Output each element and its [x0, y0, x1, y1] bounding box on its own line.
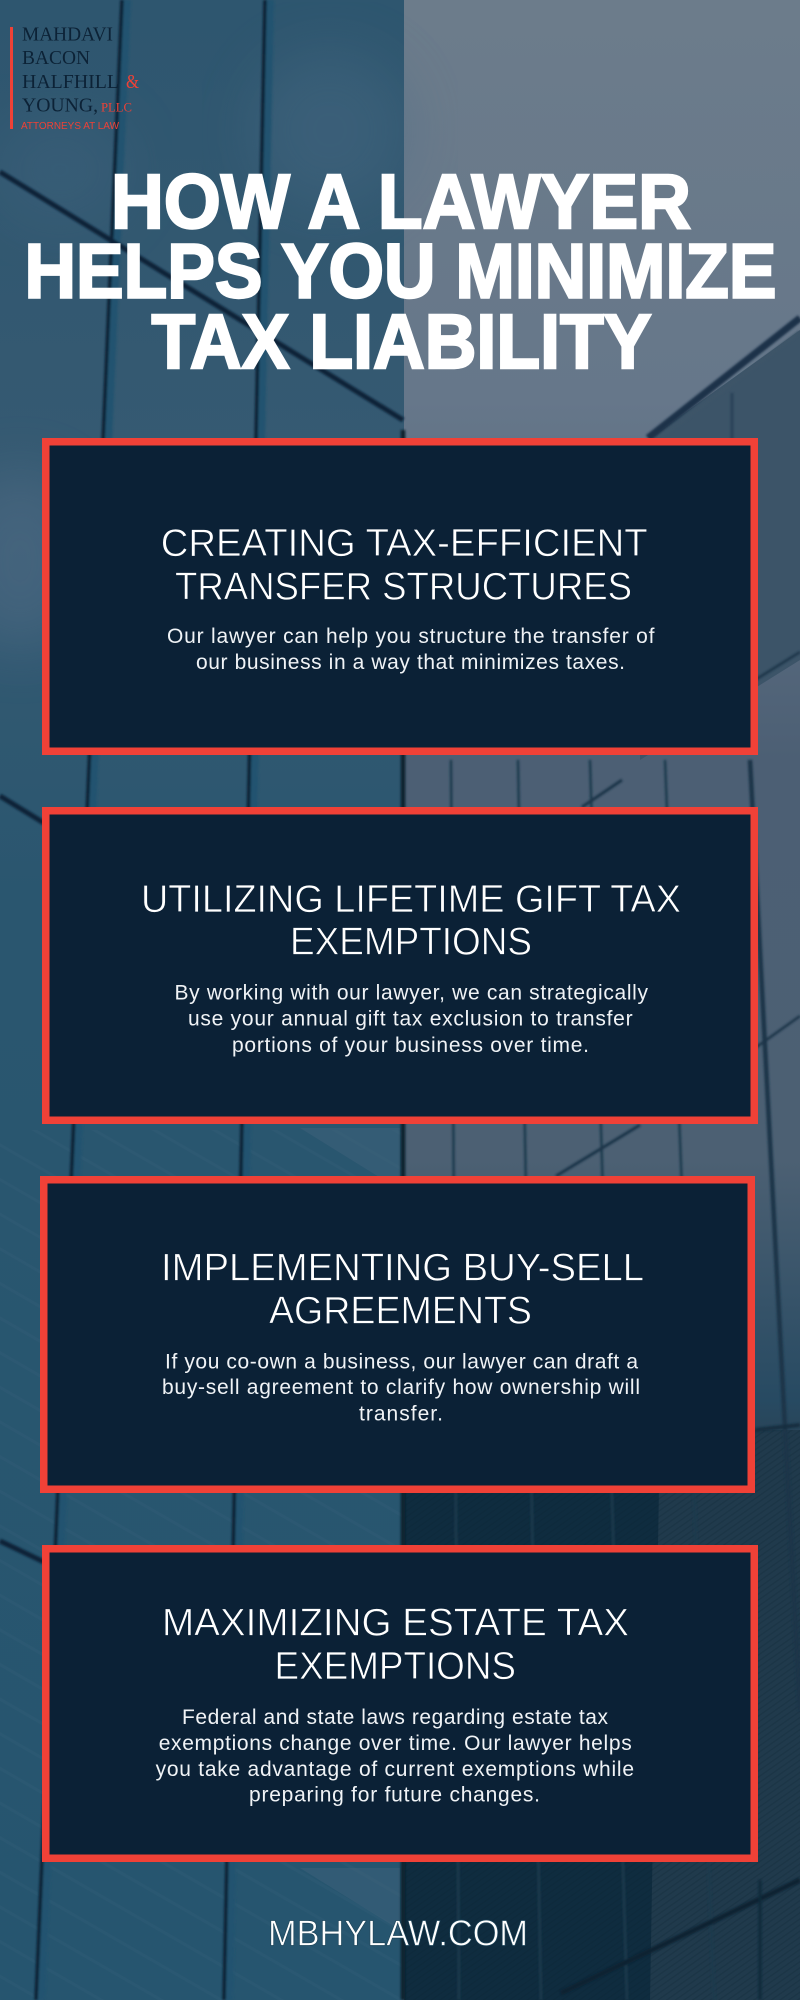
body text [162, 1351, 640, 1426]
logo firm name: BACON [22, 47, 90, 69]
logo firm name [22, 24, 139, 117]
body text: portions of your business over time. [232, 1034, 589, 1057]
heading [141, 878, 681, 964]
logo firm name: HALFHILL [22, 71, 119, 93]
title: TAX LIABILITY [152, 299, 652, 385]
logo firm name: MAHDAVI [22, 24, 113, 46]
footer website: MBHYLAW.COM [268, 1913, 528, 1954]
panel: creating tax-efficient transfer structures [46, 442, 754, 751]
panel: utilizing lifetime gift tax exemptions [46, 811, 754, 1120]
body text: preparing for future changes. [249, 1784, 540, 1807]
logo firm name: & [126, 71, 139, 93]
body text: you take advantage of current exemptions while [156, 1758, 634, 1781]
body text [167, 625, 655, 674]
heading: UTILIZING LIFETIME GIFT TAX [141, 878, 681, 921]
title: HOW A LAWYER [111, 159, 691, 245]
title [24, 159, 776, 385]
body text: use your annual gift tax exclusion to transfer [188, 1008, 633, 1031]
body text: Federal and state laws regarding estate tax [182, 1706, 608, 1729]
heading: MAXIMIZING ESTATE TAX [162, 1602, 629, 1645]
heading: EXEMPTIONS [290, 920, 532, 964]
body text: buy-sell agreement to clarify how ownership will [162, 1376, 640, 1399]
heading: IMPLEMENTING BUY-SELL [161, 1246, 644, 1290]
panel: implementing buy-sell agreements [44, 1180, 751, 1489]
panel: maximizing estate tax exemptions [46, 1549, 754, 1858]
logo: Mahdavi Bacon Halfhill & Young PLLC [10, 24, 139, 132]
heading [162, 1602, 629, 1688]
heading [161, 1246, 644, 1333]
body text [174, 982, 648, 1057]
logo firm name: YOUNG, [22, 95, 98, 117]
logo firm name: PLLC [101, 101, 132, 115]
heading: CREATING TAX-EFFICIENT [161, 522, 648, 565]
body text: If you co-own a business, our lawyer can draft a [165, 1351, 638, 1374]
body text: Our lawyer can help you structure the transfer of [167, 625, 655, 648]
logo accent bar [10, 27, 13, 129]
body text: our business in a way that minimizes taxes. [196, 651, 625, 674]
body text: transfer. [359, 1402, 443, 1426]
heading: AGREEMENTS [269, 1290, 532, 1333]
heading [161, 522, 648, 608]
body text: exemptions change over time. Our lawyer helps [159, 1732, 632, 1755]
heading: EXEMPTIONS [274, 1645, 516, 1688]
logo tagline: ATTORNEYS AT LAW [21, 120, 119, 132]
body text [156, 1706, 634, 1807]
heading: TRANSFER STRUCTURES [175, 566, 632, 608]
body text: By working with our lawyer, we can strategically [174, 982, 648, 1004]
